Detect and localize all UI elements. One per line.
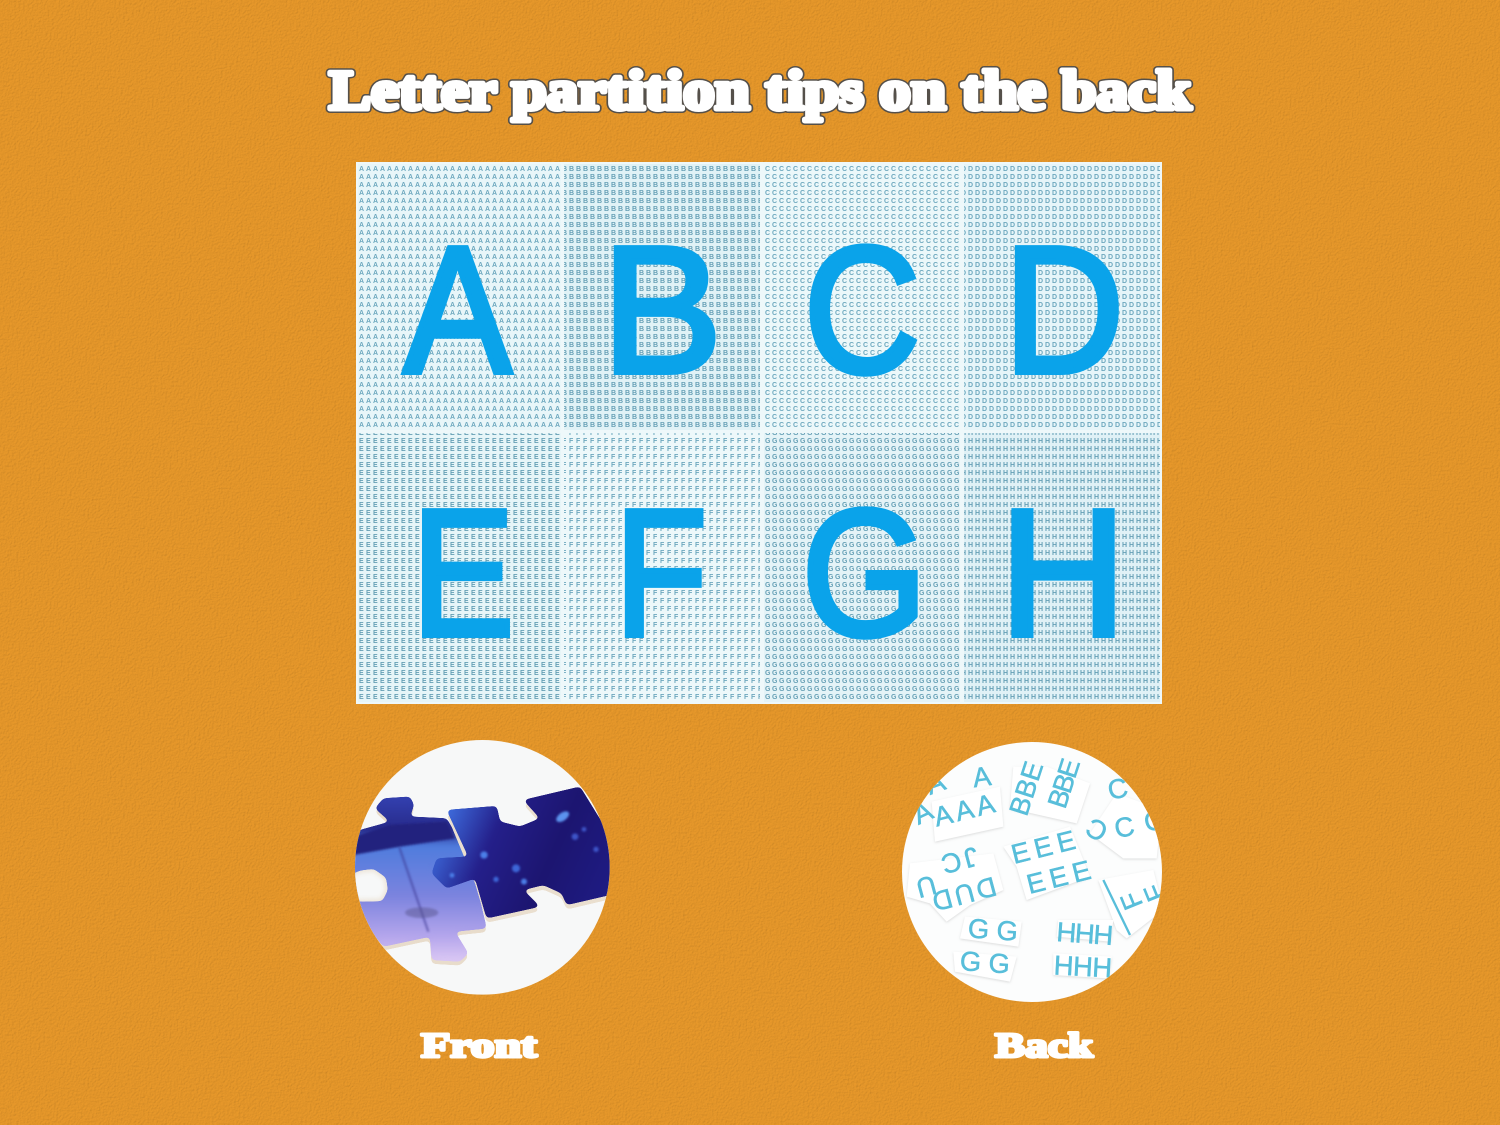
zone C: C	[804, 210, 920, 411]
zone A: A	[404, 210, 511, 411]
zone H: H	[1000, 473, 1126, 674]
zone G	[764, 433, 960, 702]
printed partition letters: GG	[967, 912, 1019, 947]
white puzzle pieces	[907, 767, 1163, 982]
right puzzle piece	[432, 787, 617, 923]
panel: letter partition grid	[356, 162, 1162, 704]
printed partition letters: EEE	[1023, 854, 1094, 900]
zone H	[964, 433, 1160, 702]
printed partition letters	[918, 758, 1160, 978]
printed partition letters: A	[908, 794, 938, 830]
zone D: D	[1004, 210, 1124, 411]
printed partition letters: BBE	[1041, 755, 1086, 812]
caption: Front: Front	[421, 1026, 537, 1065]
zone E: E	[412, 473, 514, 674]
zone E	[358, 433, 561, 702]
printed partition letters: A	[921, 765, 950, 801]
printed partition letters: HHH	[1056, 916, 1114, 951]
caption: Back: Back	[995, 1026, 1094, 1065]
zone G: G	[802, 473, 927, 674]
zone C	[764, 164, 960, 430]
photo: back of puzzle pieces	[902, 742, 1172, 1002]
printed partition letters: BBE	[1003, 758, 1049, 819]
printed partition letters: DUD	[929, 871, 1000, 918]
printed partition letters: EEE	[1008, 824, 1079, 870]
zone F: F	[615, 473, 707, 674]
left puzzle piece	[347, 797, 487, 965]
printed partition letters: F	[1114, 887, 1149, 914]
photo: front of puzzle pieces	[347, 740, 617, 995]
printed partition letters: A	[971, 760, 994, 793]
title: Letter partition tips on the back	[329, 60, 1192, 122]
zone B	[564, 164, 760, 430]
printed partition letters: F	[1137, 879, 1172, 906]
zone F	[564, 433, 760, 702]
zone A	[358, 164, 561, 430]
zone B: B	[602, 210, 722, 411]
printed partition letters: AAA	[931, 787, 999, 832]
zone D	[964, 164, 1160, 430]
printed partition letters: GG	[959, 945, 1011, 979]
printed partition letters: CC	[1111, 803, 1167, 844]
printed partition letters: CC	[1105, 767, 1154, 806]
printed partition letters: HHH	[1053, 949, 1113, 983]
printed partition letters: C	[1080, 812, 1113, 848]
printed partition letters: JC	[938, 841, 981, 880]
title: Letter partition tips on the back	[329, 60, 1192, 122]
printed partition letters: U	[913, 869, 940, 904]
